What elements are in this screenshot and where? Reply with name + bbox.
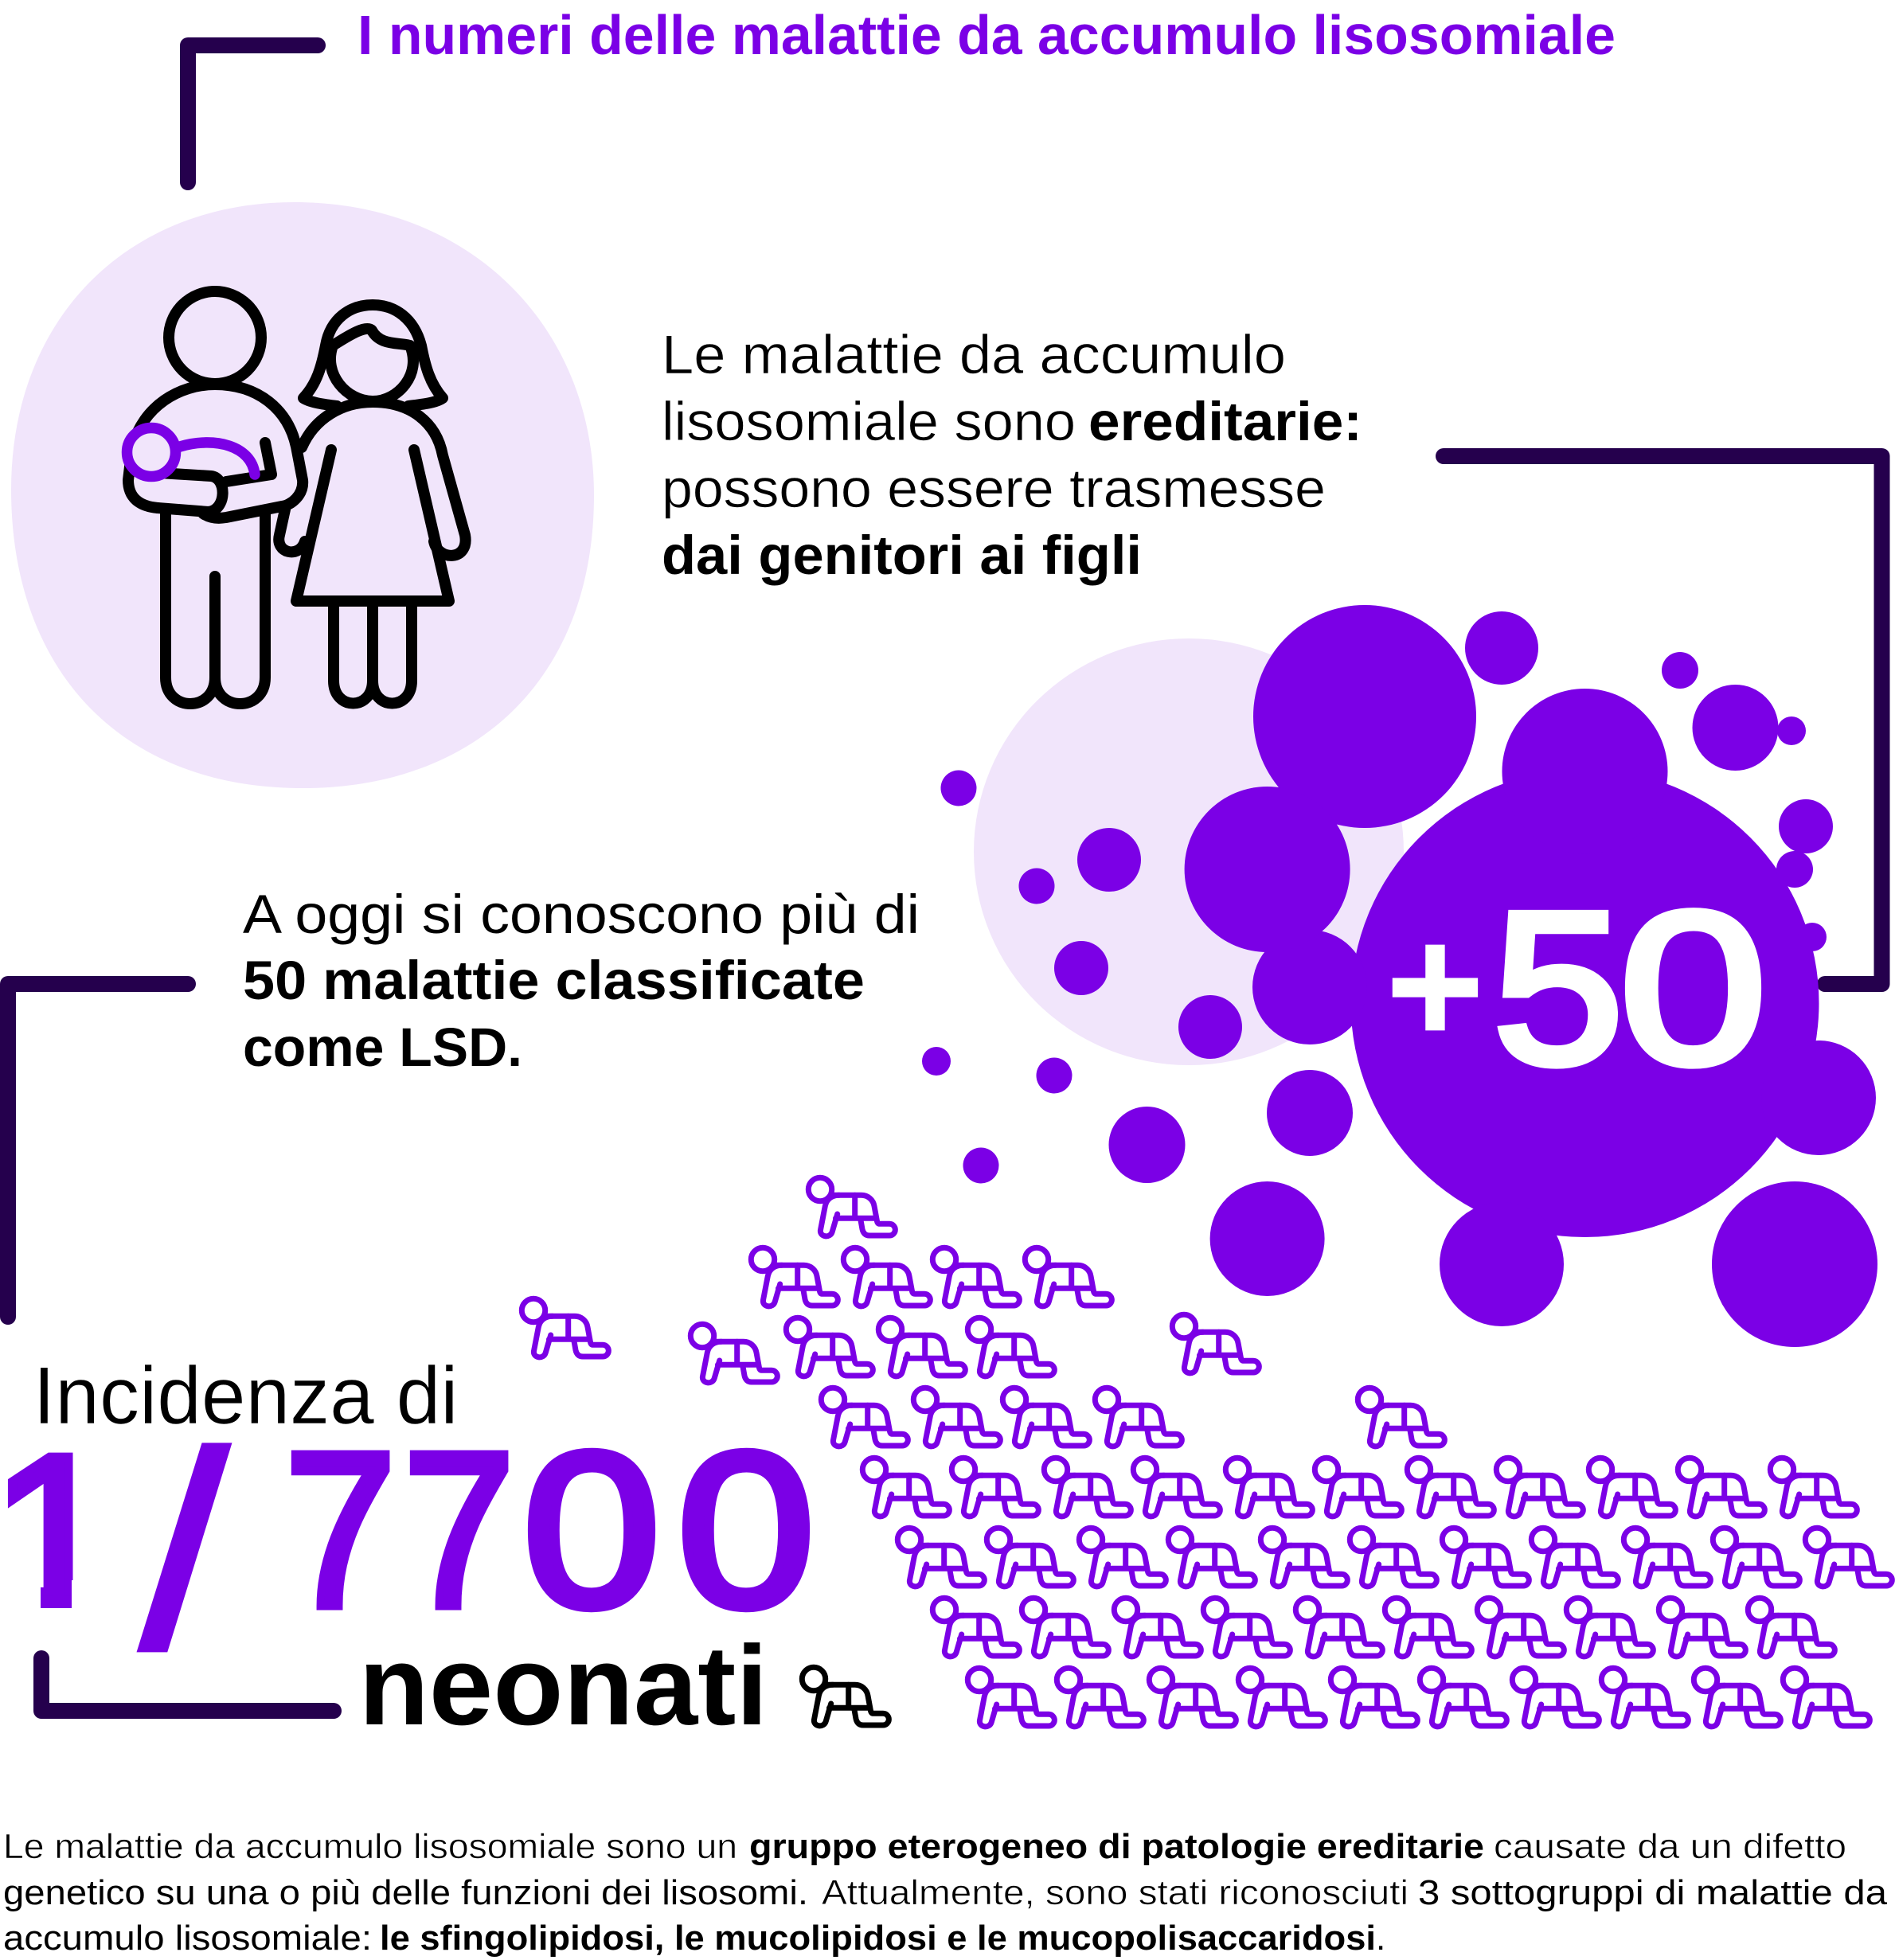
title: I numeri delle malattie da accumulo lisosomiale	[358, 4, 1616, 66]
icon: single baby middle	[690, 1324, 777, 1383]
big number: 1/7700: 7	[404, 1408, 514, 1653]
text block: more than 50 diseases: come LSD.	[243, 1017, 522, 1078]
big number: +50: 0	[1620, 867, 1767, 1109]
text block: more than 50 diseases: 50 malattie classificate	[243, 950, 865, 1011]
text block: hereditary: ereditarie:	[1088, 391, 1362, 452]
panel: light circle	[974, 638, 1404, 1065]
text block: hereditary: dai genitori ai figli	[662, 525, 1142, 586]
footer text block: causate da un difetto	[1494, 1827, 1846, 1866]
icon: top baby	[808, 1177, 895, 1236]
row 6	[932, 1598, 1834, 1657]
text: neonati: neonati	[358, 1622, 768, 1749]
row 3	[821, 1388, 1182, 1447]
bracket: left	[8, 984, 188, 1317]
text: incidence label: Incidenza di	[33, 1350, 459, 1441]
icon: newborn	[127, 428, 255, 476]
icon: black baby legend	[802, 1667, 889, 1726]
footer text block: gruppo eterogeneo di patologie ereditarie	[749, 1827, 1484, 1866]
icon: single baby left	[522, 1298, 608, 1357]
row 4	[862, 1458, 1857, 1517]
text block: hereditary: Le malattie da accumulo	[662, 324, 1286, 385]
icon: single baby right	[1172, 1314, 1259, 1373]
icon: mother	[279, 305, 466, 704]
big number: 1/7700: 7	[285, 1408, 396, 1653]
chart: bubble cluster	[922, 605, 1877, 1347]
row 1	[751, 1247, 1112, 1306]
footer text block: genetico su una o più delle funzioni dei lisosomi.	[3, 1873, 808, 1912]
big number: 1/7700: /	[140, 1396, 229, 1707]
panel: family blob	[11, 202, 594, 788]
footer text block: accumulo lisosomiale:	[3, 1919, 372, 1958]
footer text block: le sfingolipidosi, le mucolipidosi e le mucopolisaccaridosi	[380, 1919, 1376, 1958]
footer text block: Attualmente, sono stati riconosciuti	[822, 1873, 1409, 1912]
footer text block: Le malattie da accumulo lisosomiale sono un	[3, 1827, 737, 1866]
big number: +50: 5	[1493, 867, 1623, 1109]
row 5	[897, 1528, 1892, 1587]
big number: 1/7700: 0	[678, 1408, 815, 1653]
footer text block: .	[1376, 1919, 1385, 1958]
icon: family with newborn	[127, 291, 466, 704]
bracket: bottom	[41, 1658, 334, 1711]
text block: more than 50 diseases: A oggi si conoscono più di	[243, 884, 920, 945]
big number: 1/7700: 0	[523, 1408, 660, 1653]
row 2	[786, 1318, 1054, 1376]
text block: hereditary: possono essere trasmesse	[662, 458, 1326, 519]
bracket: right	[1444, 456, 1882, 984]
icon: father	[128, 291, 303, 704]
icon: single baby far right	[1358, 1388, 1444, 1447]
footer text block: 3 sottogruppi di malattie da	[1418, 1873, 1888, 1912]
pictogram: crawling babies	[522, 1177, 1892, 1727]
text block: hereditary: lisosomiale sono	[662, 391, 1076, 452]
row 7	[967, 1668, 1870, 1727]
bracket: top left	[188, 45, 318, 182]
big number: +50: +	[1389, 897, 1482, 1075]
